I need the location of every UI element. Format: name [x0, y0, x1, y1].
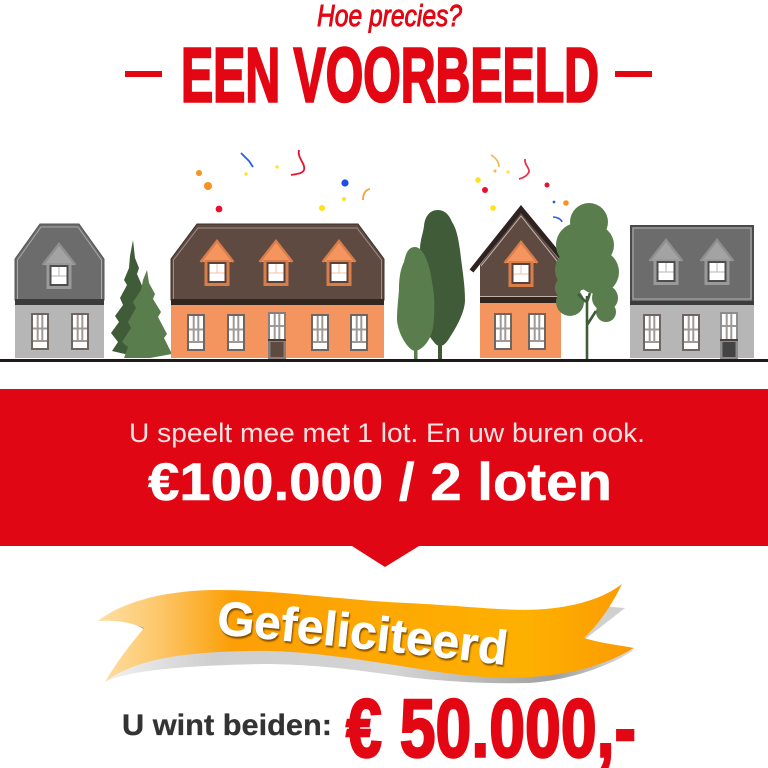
- house 3: orange gable: [472, 209, 564, 358]
- prize label: U wint beiden:: [122, 709, 332, 742]
- house 2: orange: [171, 224, 384, 359]
- ribbon: [98, 584, 634, 683]
- confetti left: [196, 150, 370, 212]
- banner amount: €100.000 / 2 loten: [148, 453, 612, 512]
- ribbon word: Gefeliciteerd: Gefeliciteerd: [219, 602, 508, 668]
- cypress trees: [397, 210, 465, 359]
- house 4: grey: [630, 226, 754, 359]
- pine trees: [111, 240, 172, 358]
- red banner: [0, 389, 768, 567]
- confetti right: [475, 155, 569, 222]
- ground line: [0, 359, 768, 362]
- house 1: grey: [15, 224, 104, 358]
- banner subtitle: U speelt mee met 1 lot. En uw buren ook.: [129, 418, 645, 448]
- round tree: [555, 203, 619, 359]
